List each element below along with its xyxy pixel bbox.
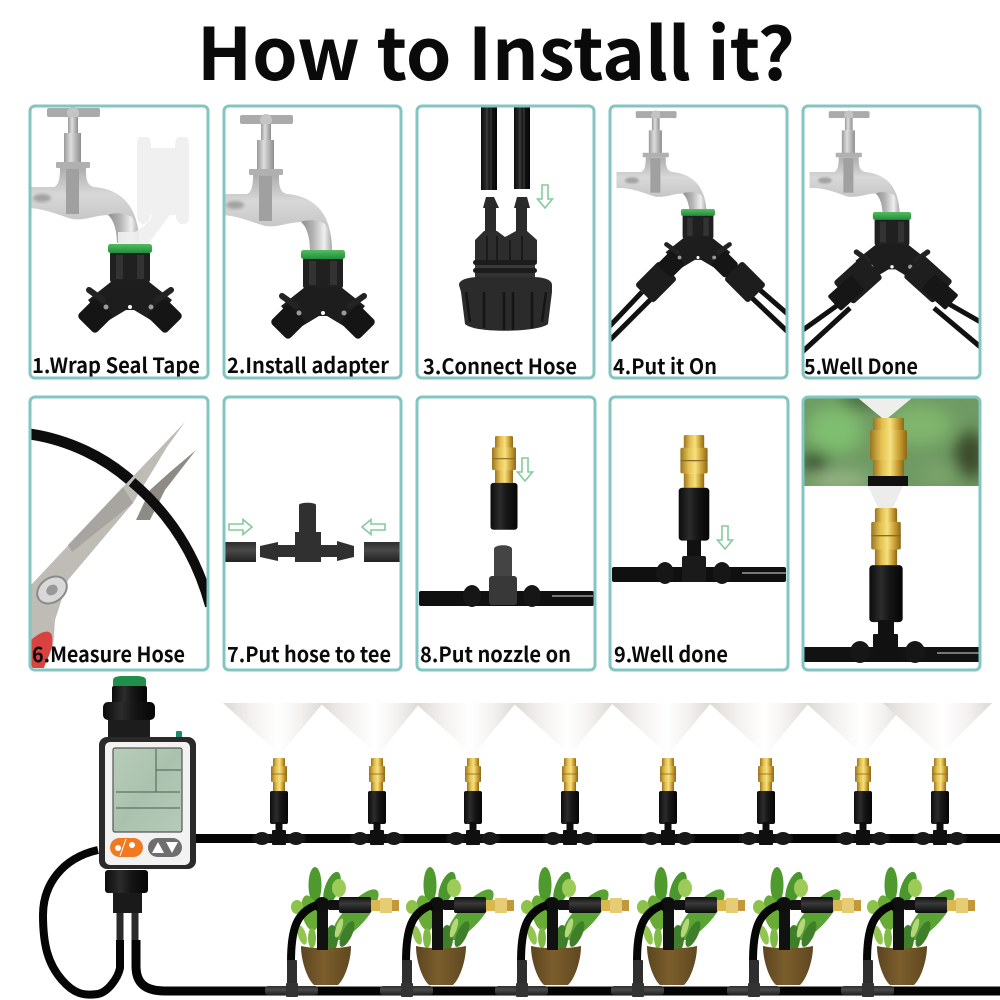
panel: step 2 install adapter: [215, 106, 401, 380]
inlet connector: [103, 676, 155, 738]
panel: finished nozzle photo: [801, 393, 986, 670]
panel: step 7 put hose to tee: [224, 397, 401, 670]
timer body: [99, 737, 196, 869]
icon: brass nozzle: [490, 436, 518, 530]
arrow: left push right: [229, 520, 252, 534]
hose pieces right: [725, 262, 786, 334]
status indicator: [176, 731, 182, 738]
step label: 5.Well Done: [804, 351, 918, 381]
potted plants with side nozzles: [265, 867, 975, 997]
panel: step 8 put nozzle on: [417, 397, 595, 670]
faceplate: [105, 742, 190, 865]
icon: nozzle on tee: [804, 508, 979, 663]
spray cone: [868, 486, 903, 508]
panel: step 3 connect hose: [417, 106, 594, 381]
step label: 4.Put it On: [613, 351, 717, 381]
arrow: push down: [538, 185, 552, 208]
step label: 8.Put nozzle on: [420, 639, 571, 669]
panel: step 1 wrap seal tape: [22, 106, 208, 380]
icon: threaded hose connector: [459, 197, 552, 331]
return hose loop: [43, 850, 120, 995]
digital water timer: [99, 676, 196, 940]
step label: 3.Connect Hose: [423, 351, 577, 381]
arrow: push down: [718, 526, 732, 549]
spray system diagram: [43, 676, 1000, 997]
icon: y adapter installed: [270, 250, 376, 340]
icon: seal tape roll: [118, 137, 189, 244]
step label: 7.Put hose to tee: [227, 639, 391, 669]
connected hoses: [804, 302, 978, 354]
grey arrow buttons: [148, 838, 182, 857]
arrow: right push left: [362, 520, 385, 534]
outlet y connector: [105, 870, 148, 940]
panel: step 9 well done: [610, 397, 788, 670]
hose pieces left: [608, 261, 677, 342]
step label: 1.Wrap Seal Tape: [32, 350, 200, 380]
panel: step 5 well done: [800, 106, 984, 381]
step label: 9.Well done: [614, 639, 728, 669]
icon: nozzle mounted on tee: [612, 435, 786, 584]
hoses: [481, 107, 530, 190]
lcd screen: [113, 748, 182, 832]
lower supply hose: [136, 940, 1000, 991]
icon: y adapter: [657, 209, 739, 279]
arrow: push down: [518, 458, 532, 481]
icon: y adapter connected: [827, 212, 959, 311]
photo: blurred greenery: [804, 398, 978, 486]
icon: tee fitting: [260, 503, 354, 562]
left hose piece: [225, 542, 256, 562]
spray cones: [223, 703, 992, 755]
step label: 2.Install adapter: [227, 350, 390, 380]
icon: scissors: [31, 422, 196, 668]
step label: 6.Measure Hose: [32, 639, 185, 669]
panel: step 6 measure hose: [30, 397, 210, 670]
upper supply hose: [195, 834, 1000, 843]
orange buttons: [110, 838, 143, 857]
nozzle row: [252, 758, 967, 845]
right hose piece: [364, 542, 400, 562]
icon: y adapter: [77, 244, 183, 334]
panel: step 4 put it on: [608, 106, 790, 381]
icon: tee on hose: [419, 545, 594, 607]
